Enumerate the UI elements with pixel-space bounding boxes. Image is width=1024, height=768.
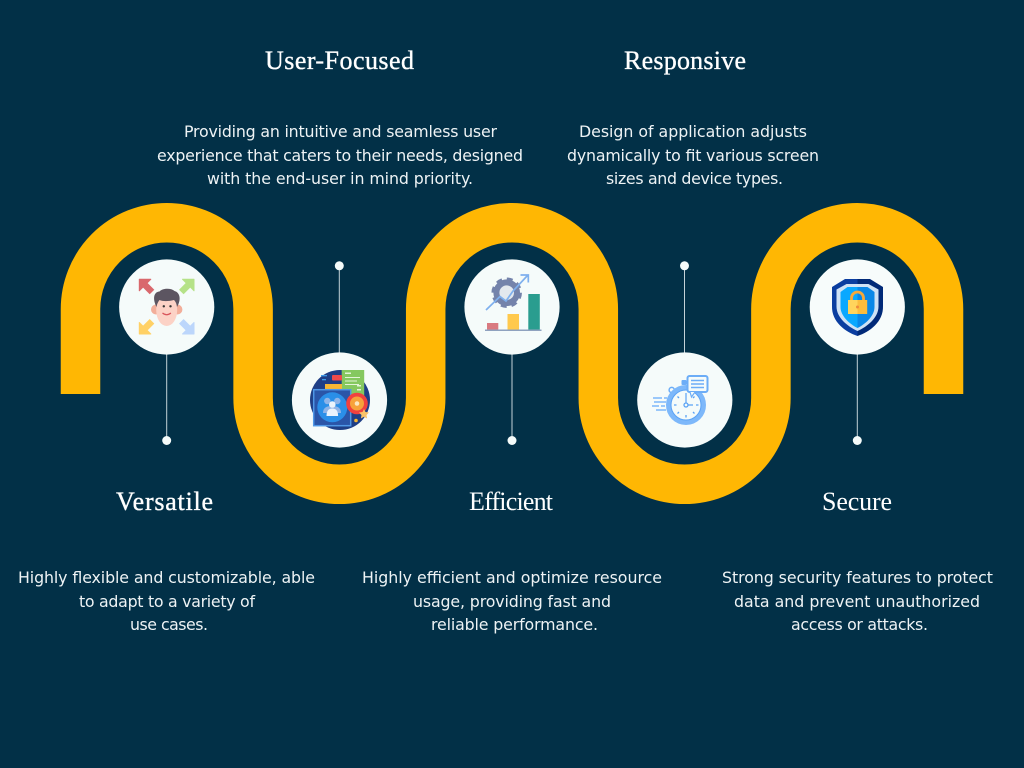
heading: Efficient: Efficient	[469, 487, 554, 516]
text: Secure description: Strong security features to protect	[722, 568, 993, 587]
text: Responsive description: Design of application adjusts	[579, 122, 807, 141]
connector: Secure	[853, 350, 862, 445]
text: Secure description: access or attacks.	[791, 615, 928, 634]
text: Secure description: data and prevent unauthorized	[734, 592, 980, 611]
text: Versatile description: to adapt to a variety of	[79, 592, 255, 611]
icon: security shield with padlock	[810, 259, 905, 355]
text: Versatile description	[18, 568, 315, 634]
connector: Efficient	[508, 350, 516, 445]
text: Efficient description: Highly efficient and optimize resource	[362, 568, 662, 587]
heading: Versatile: Versatile	[116, 487, 213, 516]
icon: gear and bar chart	[464, 259, 560, 355]
text: User-Focused description: with the end-user in mind priority.	[207, 169, 473, 188]
panel: User-Focused	[157, 46, 523, 448]
heading: Secure: Secure	[822, 487, 892, 516]
icon: person with arrows	[119, 259, 214, 355]
panel: Versatile	[18, 259, 315, 634]
text: Responsive description: dynamically to fit various screen	[567, 146, 819, 165]
icon: stopwatch with message	[637, 352, 732, 448]
text: User-Focused description	[157, 122, 523, 188]
text: Versatile description: use cases.	[130, 615, 208, 634]
panel: Efficient	[362, 259, 662, 634]
panel: Responsive	[567, 46, 819, 448]
heading: Responsive: Responsive	[624, 46, 746, 75]
icon: user profile with award	[292, 352, 387, 448]
text: User-Focused description: experience that caters to their needs, designed	[157, 146, 523, 165]
text: Efficient description	[362, 568, 662, 634]
text: User-Focused description: Providing an intuitive and seamless user	[184, 122, 498, 141]
text: Efficient description: reliable performance.	[431, 615, 598, 634]
winding yellow road	[80, 223, 944, 484]
text: Secure description	[722, 568, 993, 634]
text: Responsive description	[567, 122, 819, 188]
text: Versatile description: Highly flexible and customizable, able	[18, 568, 315, 587]
text: Efficient description: usage, providing fast and	[413, 592, 611, 611]
connector: Responsive	[680, 261, 689, 355]
text: Responsive description: sizes and device types.	[606, 169, 783, 188]
panel: Secure	[722, 259, 993, 634]
connector: User-Focused	[335, 261, 344, 355]
heading: User-Focused: User-Focused	[265, 46, 414, 75]
connector: Versatile	[162, 350, 171, 445]
